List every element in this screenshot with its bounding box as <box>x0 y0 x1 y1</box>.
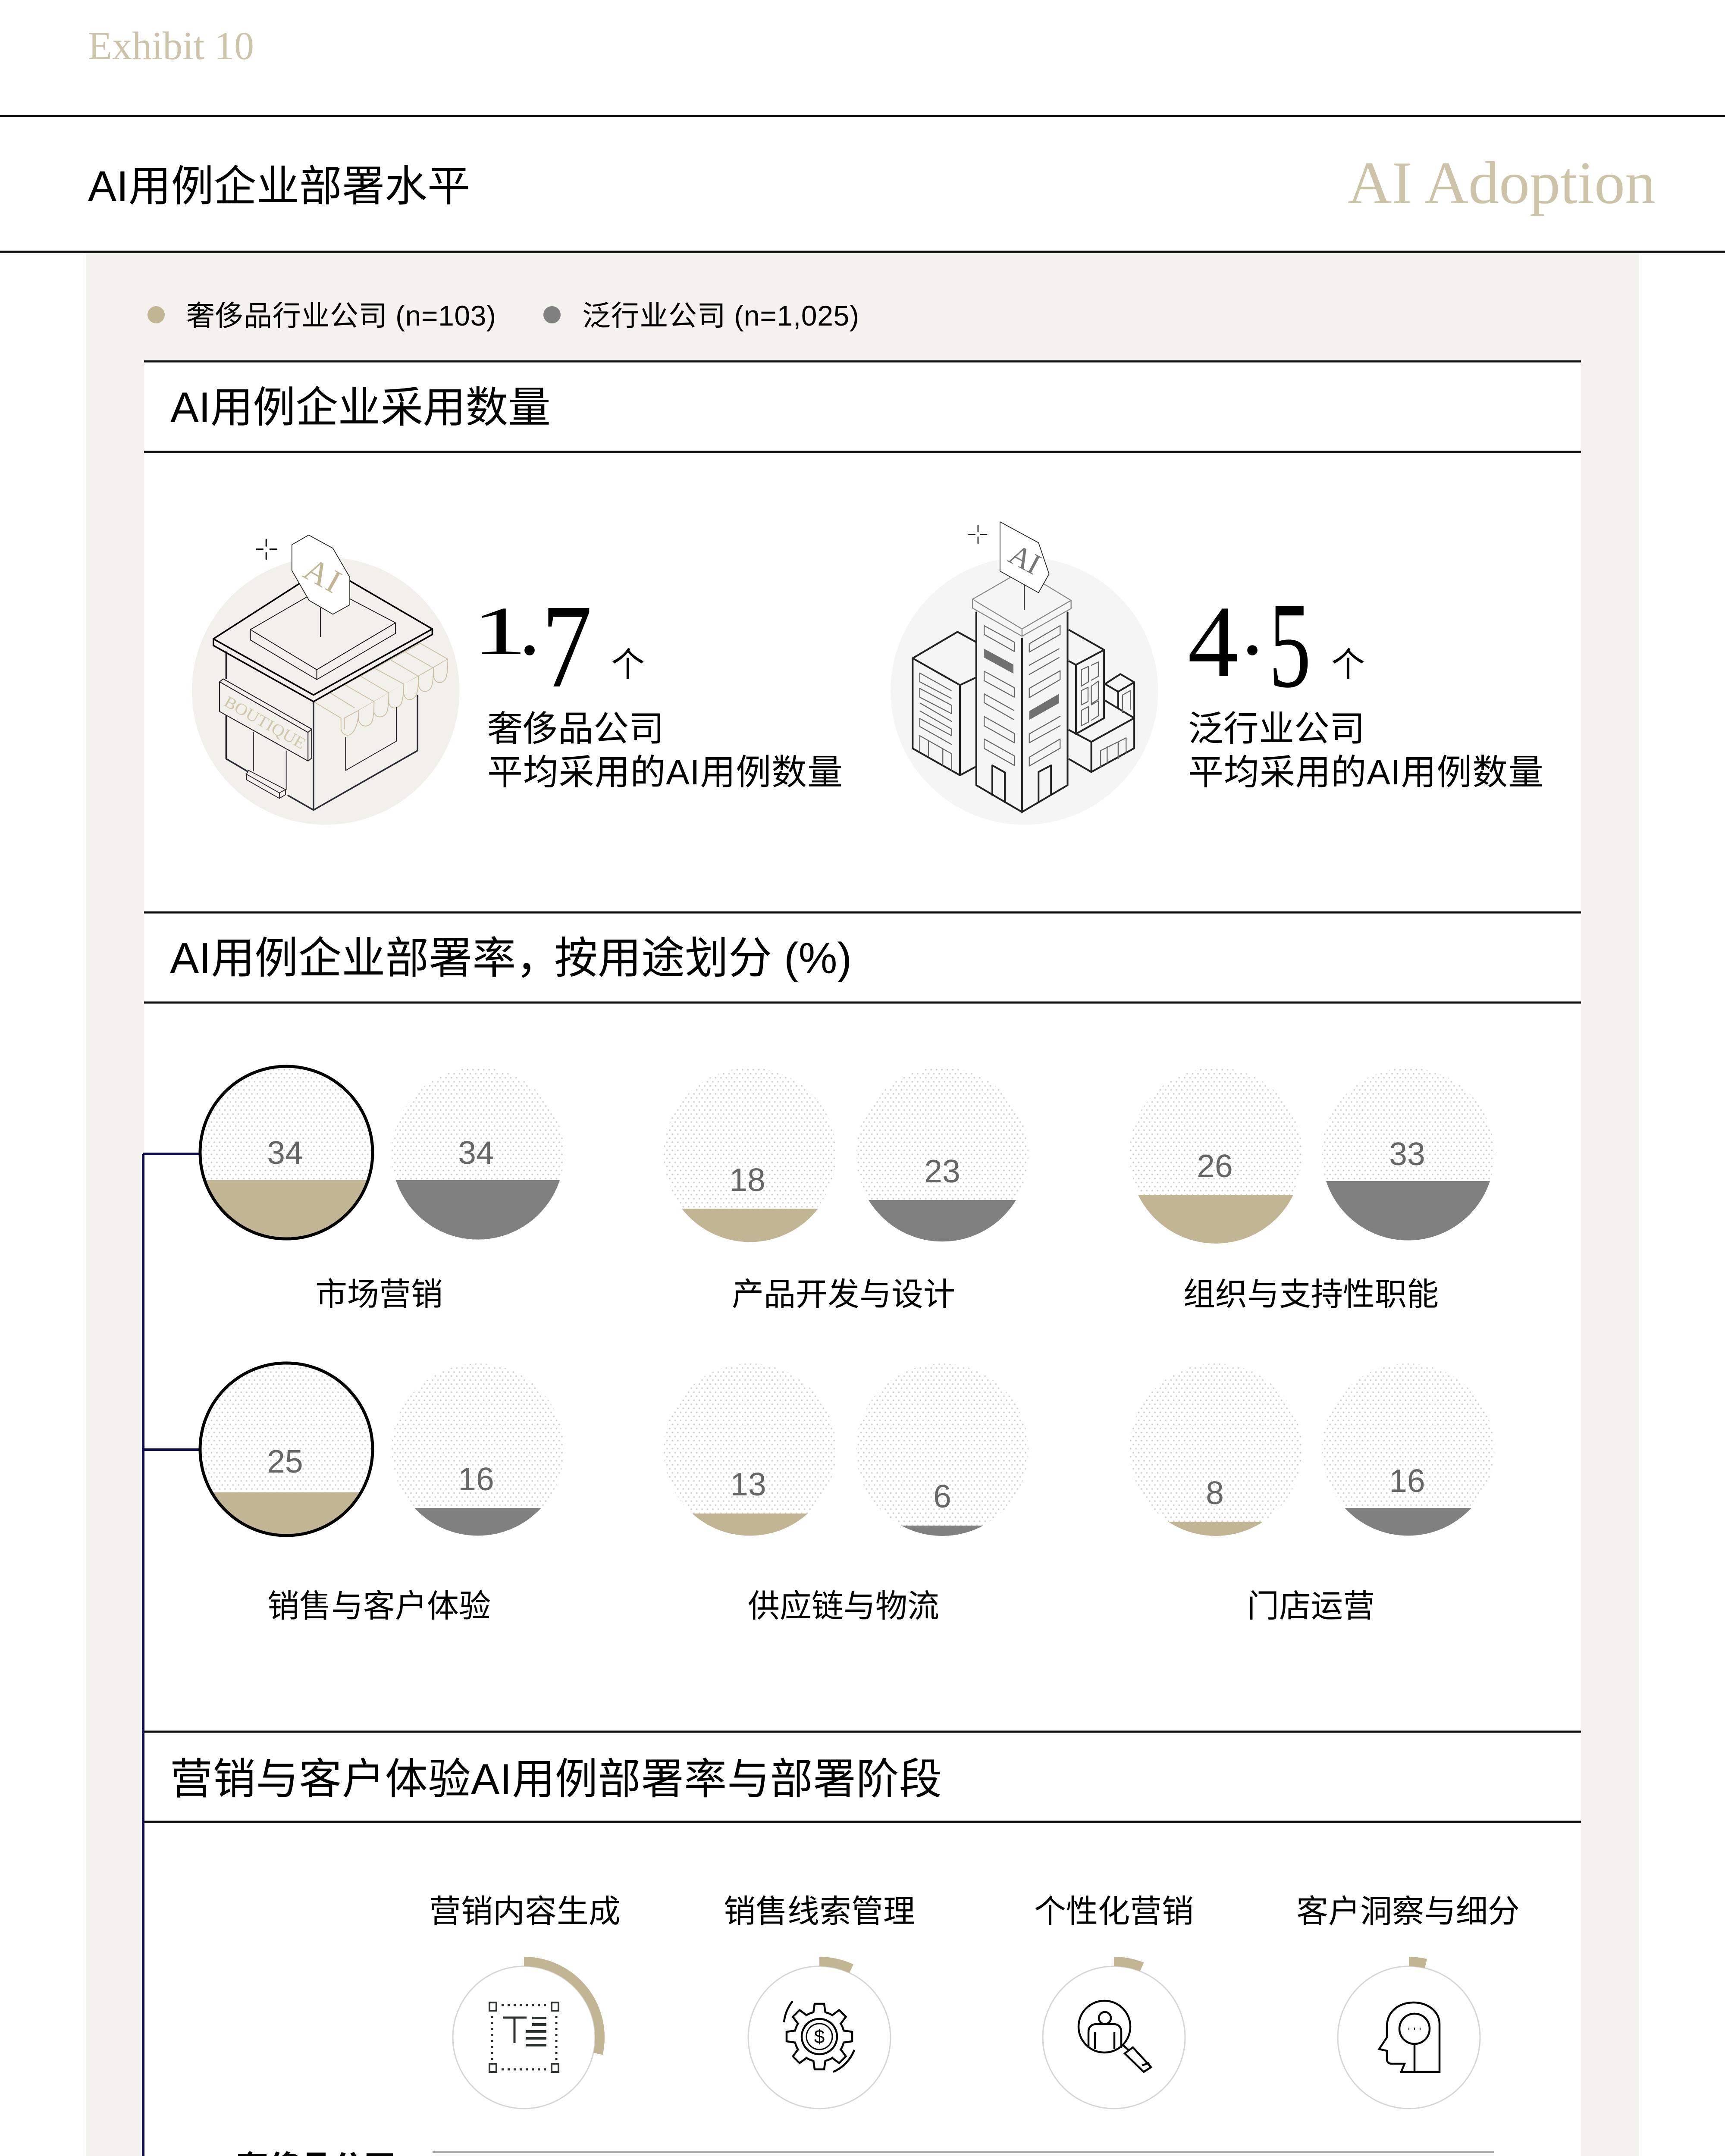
heading: deployment rate by function: AI用例企业部署率， <box>170 934 559 983</box>
heading: marketing and customer experience: 营销与客户体验AI用例部署率与部署阶段 <box>170 1755 942 1803</box>
chart: store operations: 门店运营 <box>1247 1588 1375 1624</box>
chart: supply chain and logistics <box>664 1363 1029 1624</box>
column: content generation <box>429 1893 621 2109</box>
chart: supply chain and logistics: 6 <box>933 1478 951 1514</box>
column: lead management: 销售线索管理 <box>724 1893 915 1929</box>
icon: gear with dollar: $ <box>814 2026 825 2047</box>
legend <box>147 300 859 332</box>
chart: store operations: 16 <box>1389 1463 1425 1499</box>
illustration: boutique: AI <box>298 551 347 600</box>
chart: sales and customer experience: 16 <box>458 1461 494 1497</box>
column: customer insight <box>1296 1893 1520 2109</box>
column: lead management <box>724 1893 915 2109</box>
chart: product development <box>664 1068 1029 1312</box>
column: customer insight: 客户洞察与细分 <box>1296 1893 1520 1929</box>
stat: cross-industry companies: 平均采用的AI用例数量 <box>1188 753 1543 792</box>
chart: organisation and support: 组织与支持性职能 <box>1183 1276 1439 1312</box>
stat: luxury companies: . <box>519 578 540 673</box>
column: personalised marketing: 个性化营销 <box>1034 1893 1194 1929</box>
chart: supply chain and logistics: 13 <box>730 1466 766 1502</box>
chart: organisation and support: 26 <box>1197 1148 1233 1184</box>
title: AI用例企业部署水平 <box>88 162 470 210</box>
chart: marketing: 34 <box>458 1134 494 1171</box>
illustration: city buildings: AI <box>1004 538 1046 581</box>
column: content generation: 营销内容生成 <box>429 1893 621 1929</box>
chart: marketing: 市场营销 <box>315 1276 443 1312</box>
icon: text frame <box>489 2002 558 2072</box>
stat: cross-industry companies: 4 <box>1188 585 1239 699</box>
stat: luxury companies: 平均采用的AI用例数量 <box>487 753 843 792</box>
stat: luxury companies: 个 <box>611 646 645 683</box>
chart: marketing <box>200 1066 564 1312</box>
heading: deployment rate by function: (%) <box>784 934 852 983</box>
chart: organisation and support: 33 <box>1389 1136 1425 1172</box>
legend: 泛行业公司 (n=1,025) <box>582 300 859 332</box>
illustration: city buildings <box>891 522 1158 825</box>
icon: head with thought <box>1379 2002 1440 2072</box>
series label: AI Adoption: AI Adoption <box>1348 150 1656 216</box>
stat: cross-industry companies <box>1188 578 1543 792</box>
heading: deployment rate by function: 按用途划分 <box>554 934 772 983</box>
exhibit label: Exhibit 10 <box>88 24 254 68</box>
chart: sales and customer experience <box>200 1363 564 1624</box>
chart: supply chain and logistics: 供应链与物流 <box>748 1588 939 1624</box>
connector lines <box>143 1154 222 2156</box>
stat: luxury companies <box>472 578 843 792</box>
icon: person under magnifier <box>1079 2001 1151 2072</box>
chart: store operations: 8 <box>1206 1475 1224 1511</box>
column: personalised marketing <box>1034 1893 1194 2109</box>
icon: gear with dollar <box>784 2001 854 2072</box>
stat: cross-industry companies: 5 <box>1269 578 1311 713</box>
stat: luxury companies: 1 <box>472 592 527 669</box>
stat: cross-industry companies: 泛行业公司 <box>1188 709 1365 749</box>
chart: product development: 18 <box>729 1162 765 1198</box>
heading: number of use cases: AI用例企业采用数量 <box>170 383 551 431</box>
illustration: boutique <box>192 535 459 825</box>
chart: sales and customer experience: 25 <box>267 1443 303 1479</box>
illustration: boutique: BOUTIQUE <box>221 693 309 753</box>
chart: organisation and support <box>1129 1068 1494 1312</box>
stat: luxury companies: 7 <box>542 580 592 713</box>
chart: marketing: 34 <box>267 1134 303 1171</box>
panel: white card <box>144 361 1581 2156</box>
chart: product development: 23 <box>924 1153 960 1189</box>
chart: store operations <box>1129 1363 1494 1624</box>
stat: luxury companies: 奢侈品公司 <box>487 709 664 749</box>
stat: cross-industry companies: 个 <box>1331 646 1365 683</box>
legend: 奢侈品行业公司 (n=103) <box>186 300 496 332</box>
chart: sales and customer experience: 销售与客户体验 <box>267 1588 491 1624</box>
panel: background <box>86 253 1639 2156</box>
stat: cross-industry companies: . <box>1242 578 1263 673</box>
chart: product development: 产品开发与设计 <box>732 1276 955 1312</box>
